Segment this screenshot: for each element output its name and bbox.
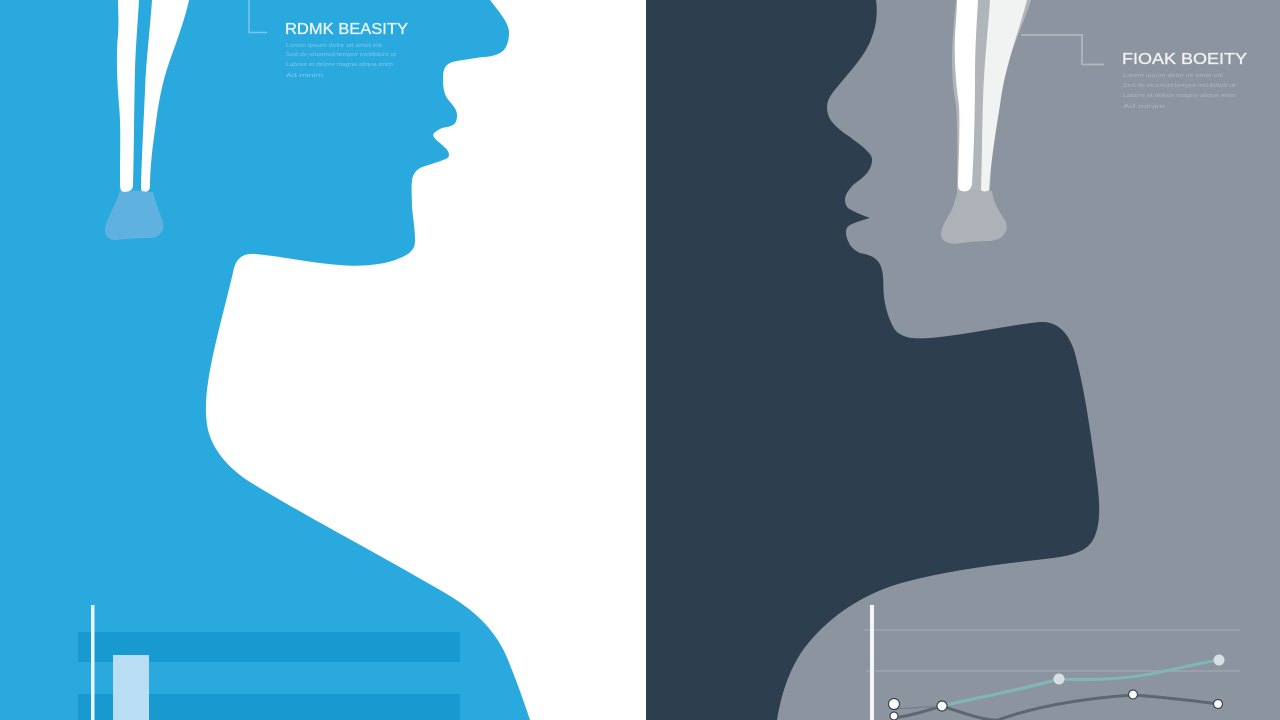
text block: left description: Lorem ipsum dolor sit amet elit: [286, 43, 383, 49]
text block: left description: Labore et dolore magna aliqua enim: [286, 62, 394, 68]
text block: right description: Labore et dolore magna aliqua enim: [1123, 93, 1237, 99]
callout: left bracket connector: [249, 0, 267, 32]
bar chart: left: [78, 605, 460, 720]
heading: right title: FIOAK BOEITY: [1122, 51, 1247, 68]
text block: right description: [1123, 73, 1237, 110]
icon: right-side left bone: [955, 0, 978, 192]
text block: right description: Ad minim: [1123, 104, 1166, 110]
chart series: teal: [942, 660, 1219, 706]
data points: [888, 654, 1224, 720]
text block: right description: Sed do eiusmod tempor incididunt ut: [1123, 83, 1236, 89]
icon: grey bone backing: [952, 0, 1031, 192]
callout: right bracket connector: [1021, 35, 1104, 64]
chart axis: [91, 605, 94, 720]
chart band: bottom: [78, 694, 460, 720]
chart band: top: [78, 632, 460, 662]
panel: right grey background: [646, 0, 1280, 720]
chart series: dark: [893, 695, 1218, 720]
panel: right dark profile silhouette: [646, 0, 1099, 720]
panel: left white background: [0, 0, 646, 720]
text block: left description: Sed do eiusmod tempor incididunt ut: [286, 52, 397, 58]
heading: left title: RDMK BEASITY: [285, 21, 408, 38]
chart axis: [870, 605, 874, 720]
icon: right-side right bone: [981, 0, 1027, 192]
text block: left description: [286, 43, 397, 79]
chart gridlines: [864, 630, 1240, 671]
icon: right white bone pair: [941, 0, 1031, 244]
text block: right description: Lorem ipsum dolor sit amet elit: [1123, 73, 1224, 79]
icon: right joint: [941, 189, 1007, 244]
text block: left description: Ad minim: [286, 73, 324, 79]
icon: left white bone pair: [105, 0, 189, 240]
panel: left blue profile silhouette: [0, 0, 530, 720]
chart bar: [113, 655, 149, 720]
icon: left joint: [105, 190, 163, 240]
line chart: right: [864, 605, 1240, 720]
